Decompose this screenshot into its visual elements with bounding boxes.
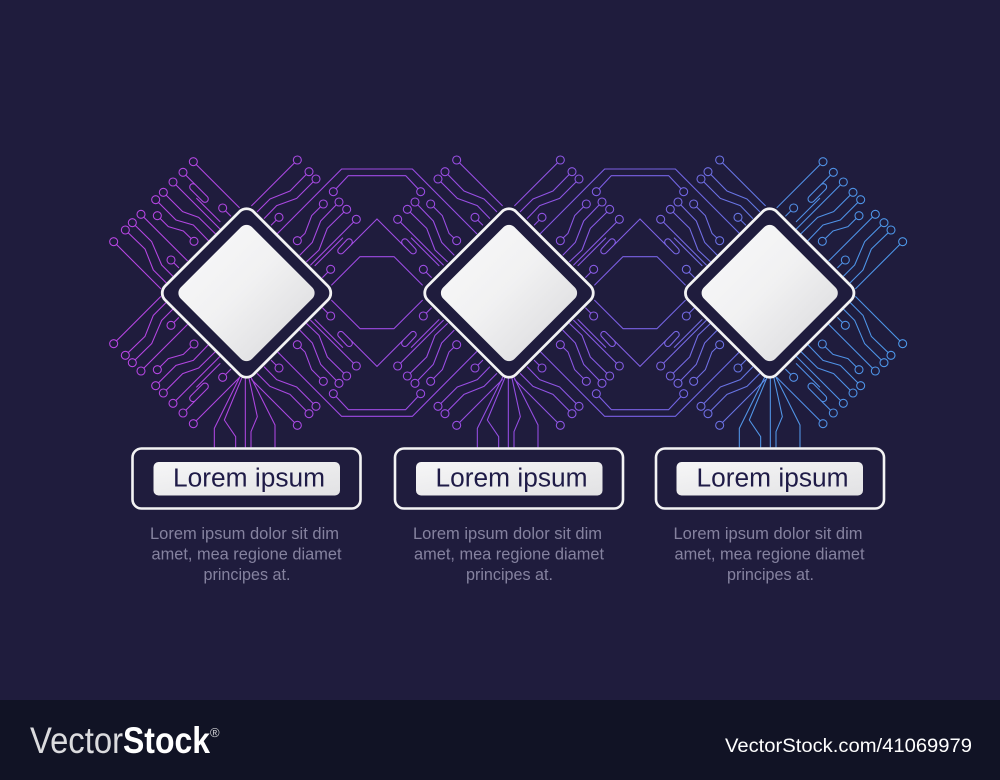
text block: left: amet, mea regione diamet — [152, 546, 342, 564]
label box: middle — [395, 448, 623, 508]
footer logo: VectorStock: Stock — [123, 720, 210, 761]
text block: left — [150, 525, 342, 584]
connector: octagon and hexagon between left and middle chips — [277, 169, 477, 416]
fan lines: middle chip — [477, 377, 538, 447]
text block: right — [674, 525, 865, 584]
text block: middle: amet, mea regione diamet — [414, 546, 604, 564]
traces: right chip left side — [640, 156, 765, 429]
label box: left: Lorem ipsum — [173, 464, 325, 492]
text block: left: principes at. — [204, 566, 290, 584]
traces: right chip outer side — [777, 158, 907, 428]
text block: right: principes at. — [727, 566, 814, 584]
text block: left: Lorem ipsum dolor sit dim — [150, 525, 339, 543]
traces: middle chip left side — [377, 156, 502, 429]
chip: middle diamond — [421, 205, 597, 381]
fan lines: left chip — [214, 377, 275, 447]
footer logo: VectorStock: ® — [210, 725, 220, 740]
label box: right: Lorem ipsum — [696, 464, 848, 492]
label box: left — [132, 448, 360, 508]
footer url: VectorStock.com/41069979 — [725, 735, 972, 757]
chip: left diamond — [158, 205, 335, 381]
text block: right: Lorem ipsum dolor sit dim — [674, 525, 862, 543]
label box: right — [656, 448, 884, 508]
text block: middle: principes at. — [466, 566, 553, 584]
circuit traces — [110, 156, 907, 447]
text block: middle: Lorem ipsum dolor sit dim — [413, 525, 602, 543]
footer bar — [0, 700, 1000, 780]
traces: middle chip right side — [515, 156, 640, 429]
footer logo: VectorStock — [30, 720, 220, 761]
chip: right diamond — [681, 205, 858, 381]
traces: left chip outer side — [110, 158, 239, 428]
footer logo: VectorStock: Vector — [30, 720, 123, 761]
traces: left chip inner side — [252, 156, 377, 429]
label box: middle: Lorem ipsum — [436, 464, 588, 492]
text block: middle — [413, 525, 604, 584]
fan lines: right chip — [739, 377, 800, 447]
connector: octagon and hexagon between middle and right chips — [540, 169, 740, 416]
text block: right: amet, mea regione diamet — [674, 546, 865, 564]
